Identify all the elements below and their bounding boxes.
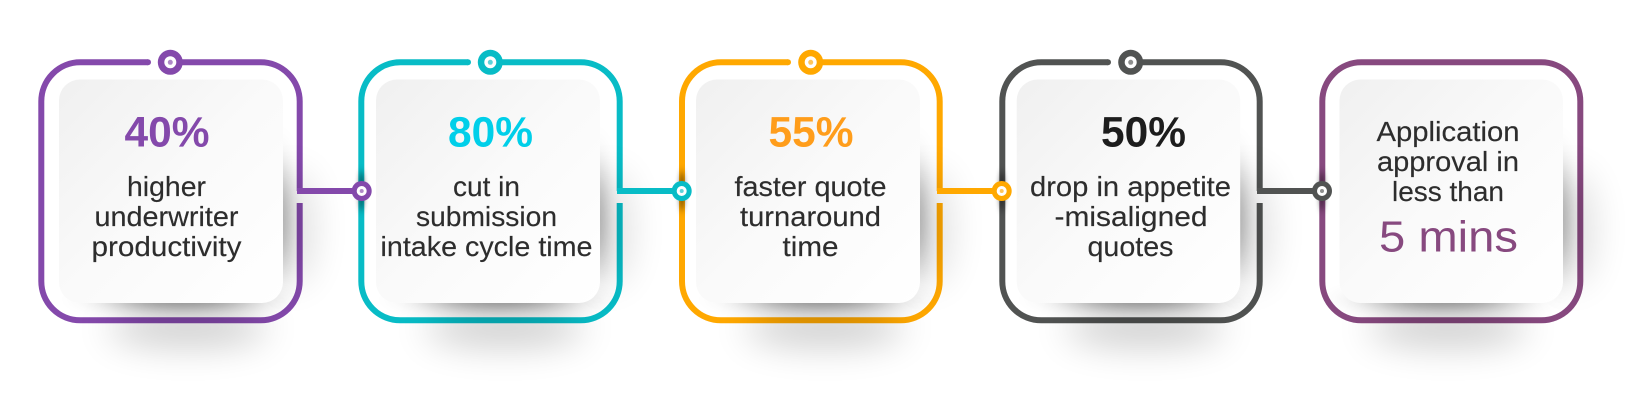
card shadow: [1368, 166, 1594, 346]
card frame: [682, 59, 940, 320]
top node: [158, 50, 183, 75]
panel: 40% higher underwriter productivity: [41, 50, 314, 346]
inner card: [696, 80, 920, 303]
description: [380, 171, 592, 262]
description: underwriter: [94, 201, 238, 232]
description: approval in: [1377, 146, 1519, 177]
stat: 80%: 80%: [448, 108, 533, 156]
description: faster quote: [734, 171, 886, 202]
description: [92, 171, 242, 262]
panel: 50% drop in appetite-misaligned quotes: [1002, 50, 1271, 346]
stat: 40%: 40%: [124, 108, 210, 156]
top node: [478, 50, 503, 75]
panel: 55% faster quote turnaround time: [682, 50, 951, 346]
stat: 55%: 55%: [768, 108, 854, 156]
card shadow: [1065, 166, 1271, 346]
inner card: [59, 80, 283, 303]
card shadow: [745, 166, 951, 346]
description: submission: [416, 201, 557, 232]
description: higher: [127, 171, 206, 202]
card frame: [41, 59, 300, 320]
description: Application: [1376, 116, 1520, 147]
panel: 80% cut in submission intake cycle time: [361, 50, 631, 346]
top node: [798, 50, 823, 75]
inner card: [1340, 80, 1563, 303]
card shadow: [108, 166, 314, 346]
stat: 5 mins: 5 mins: [1379, 212, 1518, 262]
description: productivity: [92, 231, 242, 262]
inner card: [376, 80, 600, 303]
card frame: [361, 59, 620, 320]
description: [734, 171, 886, 262]
panel: application approval in less than 5 mins: [1322, 62, 1594, 346]
description: less than: [1392, 176, 1504, 207]
card frame: [1322, 62, 1580, 320]
inner card: [1017, 80, 1240, 303]
description: [1376, 116, 1520, 207]
description: [1030, 171, 1231, 262]
top node: [1118, 50, 1143, 75]
description: cut in: [453, 171, 520, 202]
description: time: [782, 231, 838, 262]
stat: 50%: 50%: [1101, 108, 1186, 156]
description: intake cycle time: [380, 231, 592, 262]
connector: panel 2 to 3: [617, 171, 692, 211]
description: -misaligned: [1054, 201, 1208, 232]
description: turnaround: [740, 201, 881, 232]
connector: panel 1 to 2: [297, 171, 372, 211]
card shadow: [425, 166, 631, 346]
connector: panel 3 to 4: [937, 171, 1012, 211]
description: drop in appetite: [1030, 171, 1231, 202]
description: quotes: [1088, 231, 1174, 262]
card frame: [1002, 59, 1260, 320]
connector: panel 4 to 5: [1257, 171, 1332, 211]
